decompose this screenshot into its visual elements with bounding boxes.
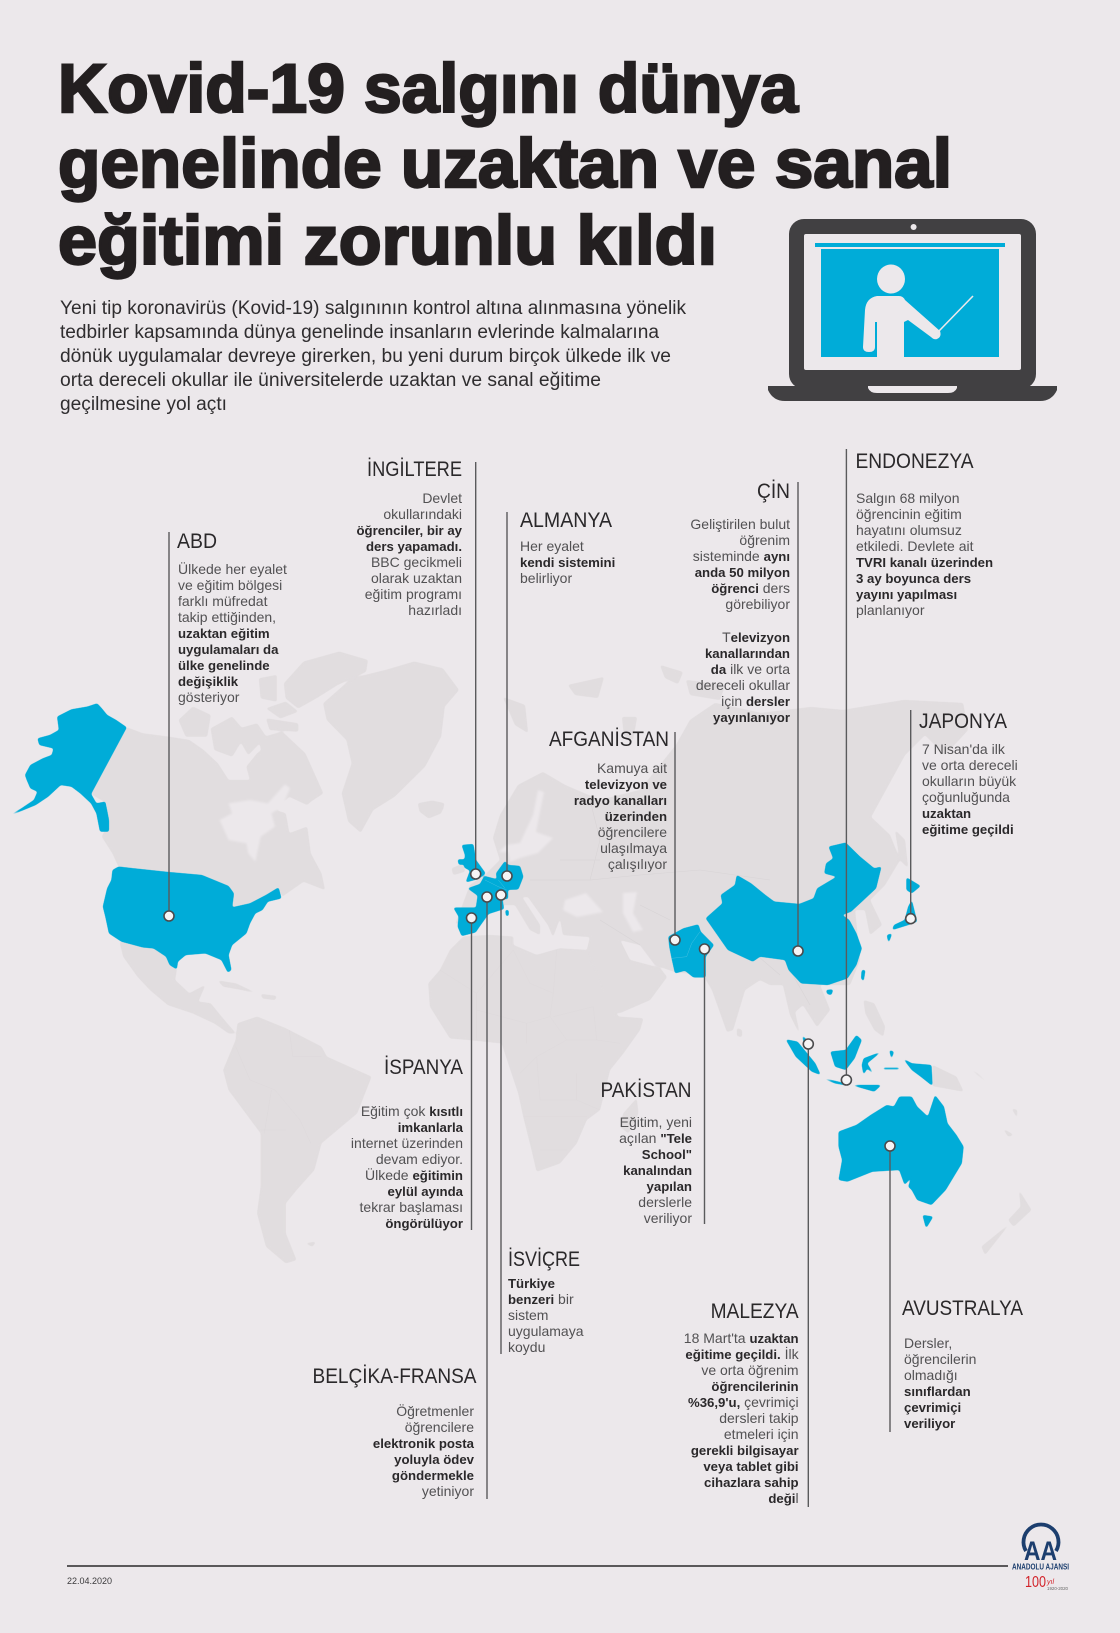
panel: ÇİN: [690, 480, 803, 956]
text: MALEZYA: etmeleri için: [724, 1426, 799, 1442]
leader: MALEZYA: [807, 1044, 809, 1507]
text: BELÇİKA-FRANSA: [373, 1402, 475, 1499]
text: ENDONEZYA: Salgın 68 milyon: [856, 490, 960, 506]
text: ÇİN: da ilk ve orta: [711, 661, 790, 677]
pin: ABD: [164, 911, 174, 921]
heading: İNGİLTERE: İNGİLTERE: [367, 458, 462, 481]
text: ÇİN: Geliştirilen bulut: [690, 516, 790, 532]
text: MALEZYA: 18 Mart'ta uzaktan: [684, 1330, 799, 1346]
logo: Anadolu Ajansı: 1920-2020: [1047, 1586, 1069, 1591]
text: AFGANİSTAN: Kamuya ait: [597, 760, 667, 776]
text: İSPANYA: Eğitim çok kısıtlı: [361, 1103, 463, 1119]
panel: PAKİSTAN: [600, 944, 710, 1226]
panel: BELÇİKA-FRANSA: [312, 892, 492, 1499]
panel: İSVİÇRE: [496, 890, 584, 1355]
text: AFGANİSTAN: ulaşılmaya: [600, 840, 667, 856]
text: İSPANYA: internet üzerinden: [351, 1135, 463, 1151]
text: MALEZYA: cihazlara sahip: [704, 1475, 799, 1490]
Malaysia, Indonesia and Australia: [786, 1035, 964, 1228]
heading: ALMANYA: ALMANYA: [520, 509, 612, 532]
heading: ABD: ABD: [177, 530, 217, 553]
icon: laptop with teacher: [768, 219, 1057, 401]
text: BELÇİKA-FRANSA: öğrencilere: [405, 1419, 474, 1435]
text: ABD: takip ettiğinden,: [178, 609, 276, 625]
heading: ÇİN: ÇİN: [757, 480, 790, 503]
text: ABD: değişiklik: [178, 674, 239, 689]
panel: MALEZYA: [684, 1039, 813, 1507]
intro text: [60, 298, 686, 415]
text: İSVİÇRE: benzeri bir: [508, 1291, 574, 1307]
leader: AFGANİSTAN: [674, 732, 676, 940]
text: İSPANYA: devam ediyor.: [376, 1151, 463, 1167]
text: MALEZYA: veya tablet gibi: [703, 1459, 799, 1474]
panel: AFGANİSTAN: [549, 728, 680, 945]
text: AVUSTRALYA: çevrimiçi: [904, 1400, 961, 1415]
text: JAPONYA: uzaktan: [922, 806, 971, 821]
text: ALMANYA: kendi sistemini: [520, 555, 615, 570]
Afghanistan and Pakistan: [668, 924, 714, 977]
text: ENDONEZYA: [856, 490, 993, 618]
text: ÇİN: yayınlanıyor: [713, 710, 790, 725]
text: ABD: uzaktan eğitim: [178, 626, 270, 641]
logo: Anadolu Ajansı: ANADOLU AJANSI: [1012, 1562, 1069, 1572]
text: ÇİN: anda 50 milyon: [695, 565, 790, 580]
pin: İNGİLTERE: [471, 869, 481, 879]
leader: BELÇİKA-FRANSA: [486, 897, 488, 1499]
text: JAPONYA: eğitime geçildi: [922, 822, 1014, 837]
heading: AVUSTRALYA: AVUSTRALYA: [902, 1297, 1023, 1320]
text: ENDONEZYA: yayını yapılması: [856, 587, 957, 602]
text: ENDONEZYA: hayatını olumsuz: [856, 522, 962, 538]
pin: ENDONEZYA: [841, 1075, 851, 1085]
text: İSPANYA: imkanlarla: [398, 1120, 464, 1135]
USA: [7, 703, 281, 973]
leader: İNGİLTERE: [475, 462, 477, 874]
text: PAKİSTAN: School": [642, 1147, 692, 1162]
leader: PAKİSTAN: [704, 949, 706, 1224]
intro text: Yeni tip koronavirüs (Kovid-19) salgınının kontrol altına alınmasına yönelik: [60, 298, 686, 319]
text: İNGİLTERE: [356, 490, 463, 618]
leader: ALMANYA: [506, 512, 508, 876]
text: ALMANYA: belirliyor: [520, 570, 572, 586]
text: PAKİSTAN: derslerle: [638, 1194, 692, 1210]
title: Kovid-19 salgını dünya: [58, 50, 799, 127]
pin: BELÇİKA-FRANSA: [482, 892, 492, 902]
text: İSPANYA: tekrar başlaması: [360, 1199, 463, 1215]
text: PAKİSTAN: kanalından: [623, 1163, 692, 1178]
text: ABD: uygulamaları da: [178, 642, 279, 657]
text: AFGANİSTAN: üzerinden: [605, 809, 667, 824]
text: İNGİLTERE: okullarındaki: [383, 506, 462, 522]
text: AFGANİSTAN: radyo kanalları: [574, 793, 667, 808]
pin: ÇİN: [793, 946, 803, 956]
text: MALEZYA: gerekli bilgisayar: [691, 1443, 799, 1458]
highlighted countries: [7, 703, 964, 1228]
text: İNGİLTERE: hazırladı: [408, 602, 462, 618]
text: ÇİN: öğrenci ders: [711, 580, 790, 596]
logo: Anadolu Ajansı: [1012, 1524, 1069, 1591]
heading: BELÇİKA-FRANSA: BELÇİKA-FRANSA: [312, 1365, 476, 1388]
leader: AVUSTRALYA: [889, 1146, 891, 1432]
text: ABD: Ülkede her eyalet: [178, 560, 287, 577]
heading: ENDONEZYA: ENDONEZYA: [856, 450, 974, 473]
text: BELÇİKA-FRANSA: elektronik posta: [373, 1436, 475, 1451]
text: ABD: farklı müfredat: [178, 593, 268, 609]
text: İNGİLTERE: olarak uzaktan: [371, 570, 462, 586]
leader: JAPONYA: [910, 710, 912, 919]
text: BELÇİKA-FRANSA: göndermekle: [392, 1468, 474, 1483]
text: BELÇİKA-FRANSA: yetiniyor: [422, 1483, 474, 1499]
text: MALEZYA: değil: [768, 1490, 799, 1506]
leader: ENDONEZYA: [845, 449, 847, 1080]
title: eğitimi zorunlu kıldı: [58, 202, 717, 279]
logo: Anadolu Ajansı: AA: [1024, 1536, 1057, 1566]
heading: İSPANYA: İSPANYA: [384, 1056, 463, 1079]
text: ABD: gösteriyor: [178, 689, 240, 705]
Europe: [453, 844, 523, 936]
text: ABD: ülke genelinde: [178, 658, 270, 673]
pin: İSVİÇRE: [496, 890, 506, 900]
text: İNGİLTERE: BBC gecikmeli: [371, 554, 462, 570]
text: PAKİSTAN: yapılan: [647, 1179, 692, 1194]
China and Japan: [706, 843, 921, 995]
title: genelinde uzaktan ve sanal: [58, 125, 952, 202]
leader: İSVİÇRE: [500, 895, 502, 1354]
text: PAKİSTAN: Eğitim, yeni: [620, 1114, 692, 1130]
text: İSPANYA: eylül ayında: [388, 1184, 464, 1199]
leader: ÇİN: [797, 482, 799, 951]
text: İSPANYA: [351, 1103, 464, 1231]
text: ÇİN: öğrenim: [739, 532, 790, 548]
text: İSVİÇRE: sistem: [508, 1307, 548, 1323]
text: AVUSTRALYA: olmadığı: [904, 1367, 958, 1383]
text: AVUSTRALYA: öğrencilerin: [904, 1351, 976, 1367]
panel: ALMANYA: [502, 509, 615, 881]
title: [58, 50, 952, 279]
intro text: geçilmesine yol açtı: [60, 394, 227, 415]
text: İNGİLTERE: eğitim programı: [365, 586, 462, 602]
text: ABD: ve eğitim bölgesi: [178, 577, 282, 593]
panel: İSPANYA: [351, 913, 476, 1231]
leader: İSPANYA: [470, 918, 472, 1230]
text: AVUSTRALYA: Dersler,: [904, 1335, 952, 1351]
text: AFGANİSTAN: çalışılıyor: [608, 856, 667, 872]
text: İNGİLTERE: öğrenciler, bir ay: [356, 523, 463, 538]
text: AVUSTRALYA: sınıflardan: [904, 1384, 971, 1399]
text: İNGİLTERE: ders yapamadı.: [366, 539, 462, 554]
panel: ENDONEZYA: [841, 449, 993, 1085]
text: PAKİSTAN: veriliyor: [644, 1210, 692, 1226]
intro text: orta dereceli okullar ile üniversitelerde uzaktan ve sanal eğitime: [60, 370, 601, 391]
text: İSVİÇRE: [508, 1276, 584, 1355]
panel: İNGİLTERE: [356, 458, 481, 879]
text: ALMANYA: [520, 538, 615, 586]
text: JAPONYA: ve orta dereceli: [922, 757, 1018, 773]
pin: AFGANİSTAN: [670, 935, 680, 945]
text: BELÇİKA-FRANSA: yoluyla ödev: [394, 1452, 475, 1467]
text: ÇİN: sisteminde aynı: [693, 548, 790, 564]
text: ÇİN: [690, 516, 790, 725]
text: AFGANİSTAN: televizyon ve: [585, 777, 667, 792]
logo: Anadolu Ajansı: 100: [1025, 1574, 1046, 1591]
text: ENDONEZYA: TVRI kanalı üzerinden: [856, 555, 993, 570]
text: PAKİSTAN: açılan "Tele: [619, 1130, 692, 1146]
text: ÇİN: için dersler: [721, 693, 790, 709]
text: ENDONEZYA: öğrencinin eğitim: [856, 506, 962, 522]
pin: ALMANYA: [502, 871, 512, 881]
heading: JAPONYA: JAPONYA: [919, 710, 1007, 733]
text: ENDONEZYA: planlanıyor: [856, 602, 925, 618]
text: ABD: [178, 560, 287, 705]
pin: PAKİSTAN: [700, 944, 710, 954]
text: ÇİN: dereceli okullar: [696, 677, 790, 693]
text: AVUSTRALYA: [904, 1335, 976, 1431]
text: MALEZYA: %36,9'u, çevrimiçi: [688, 1394, 799, 1410]
text: JAPONYA: [922, 741, 1018, 837]
text: MALEZYA: öğrencilerinin: [711, 1379, 799, 1394]
text: MALEZYA: dersleri takip: [719, 1410, 799, 1426]
footer date: 22.04.2020: [67, 1576, 112, 1586]
text: İSVİÇRE: Türkiye: [508, 1276, 555, 1291]
world map: [7, 652, 1031, 1263]
text: JAPONYA: 7 Nisan'da ilk: [922, 741, 1006, 757]
pin: MALEZYA: [803, 1039, 813, 1049]
text: İSPANYA: Ülkede eğitimin: [365, 1166, 463, 1183]
text: JAPONYA: okulların büyük: [922, 773, 1017, 789]
text: MALEZYA: [684, 1330, 800, 1506]
text: ENDONEZYA: 3 ay boyunca ders: [856, 571, 971, 586]
text: JAPONYA: çoğunluğunda: [922, 789, 1010, 805]
gray land masses: [91, 652, 1031, 1263]
text: İSVİÇRE: koydu: [508, 1339, 545, 1355]
text: İSPANYA: öngörülüyor: [385, 1216, 463, 1231]
intro text: tedbirler kapsamında dünya genelinde insanların evlerinde kalmalarına: [60, 322, 659, 343]
text: AFGANİSTAN: öğrencilere: [598, 824, 667, 840]
leader: ABD: [168, 532, 170, 916]
text: BELÇİKA-FRANSA: Öğretmenler: [396, 1402, 474, 1419]
panel: AVUSTRALYA: [885, 1141, 1023, 1432]
text: MALEZYA: eğitime geçildi. İlk: [685, 1345, 800, 1362]
text: AVUSTRALYA: veriliyor: [904, 1416, 955, 1431]
heading: AFGANİSTAN: AFGANİSTAN: [549, 728, 669, 751]
text: AFGANİSTAN: [574, 760, 667, 872]
pin: AVUSTRALYA: [885, 1141, 895, 1151]
text: ÇİN: kanallarından: [705, 646, 790, 661]
logo: Anadolu Ajansı: yıl: [1046, 1579, 1054, 1586]
panel: ABD: [164, 530, 287, 921]
pin: İSPANYA: [466, 913, 476, 923]
pin: JAPONYA: [906, 914, 916, 924]
heading: MALEZYA: MALEZYA: [711, 1300, 799, 1323]
text: ALMANYA: Her eyalet: [520, 538, 584, 554]
text: PAKİSTAN: [619, 1114, 692, 1226]
text: ÇİN: görebiliyor: [725, 596, 790, 612]
text: İNGİLTERE: Devlet: [422, 490, 462, 506]
text: MALEZYA: ve orta öğrenim: [701, 1362, 799, 1378]
heading: PAKİSTAN: PAKİSTAN: [600, 1079, 692, 1102]
intro text: dönük uygulamalar devreye girerken, bu yeni durum birçok ülkede ilk ve: [60, 346, 671, 367]
text: ÇİN: Televizyon: [722, 629, 790, 645]
heading: İSVİÇRE: İSVİÇRE: [508, 1248, 580, 1271]
text: ENDONEZYA: etkiledi. Devlete ait: [856, 538, 974, 554]
text: İSVİÇRE: uygulamaya: [508, 1323, 584, 1339]
panel: JAPONYA: [906, 710, 1018, 924]
